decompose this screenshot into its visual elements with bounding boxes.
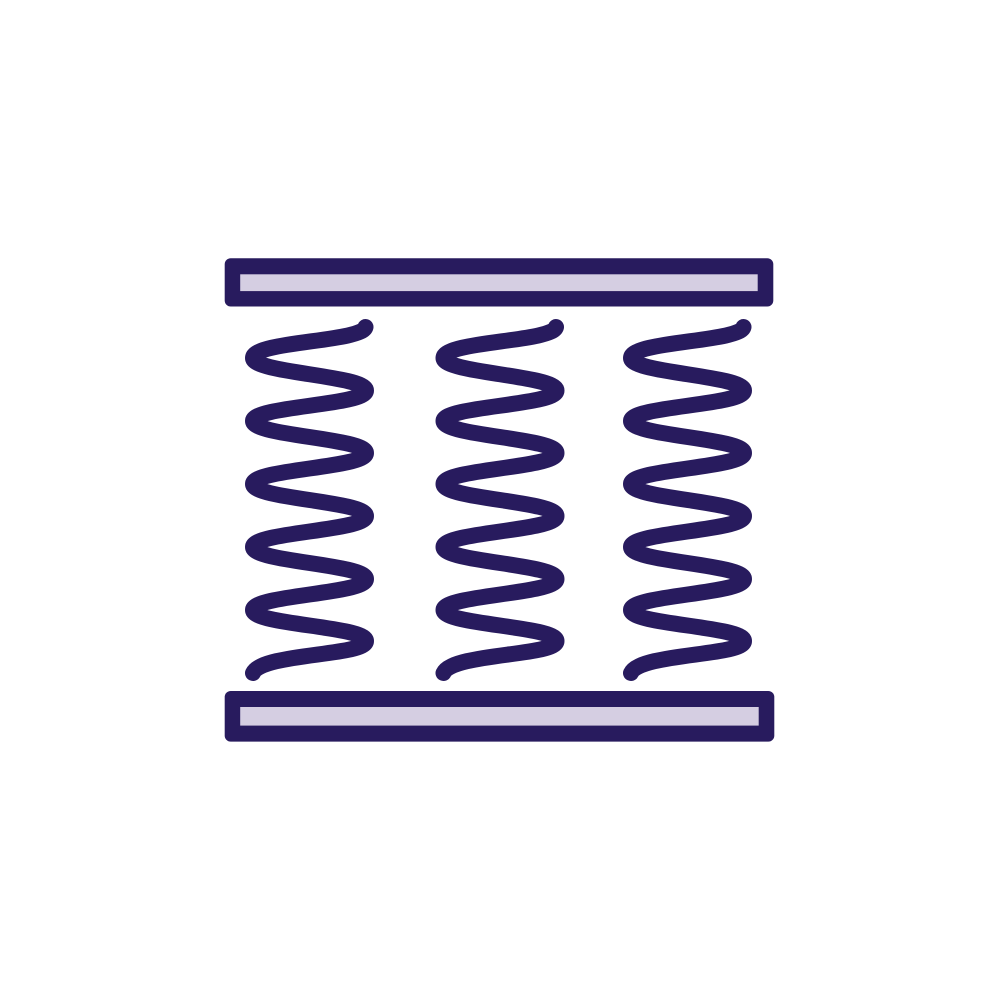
spring: right [631,327,744,673]
bottom plate [225,691,774,742]
spring: middle [444,327,556,673]
top plate [225,258,773,306]
spring: left [253,327,366,673]
